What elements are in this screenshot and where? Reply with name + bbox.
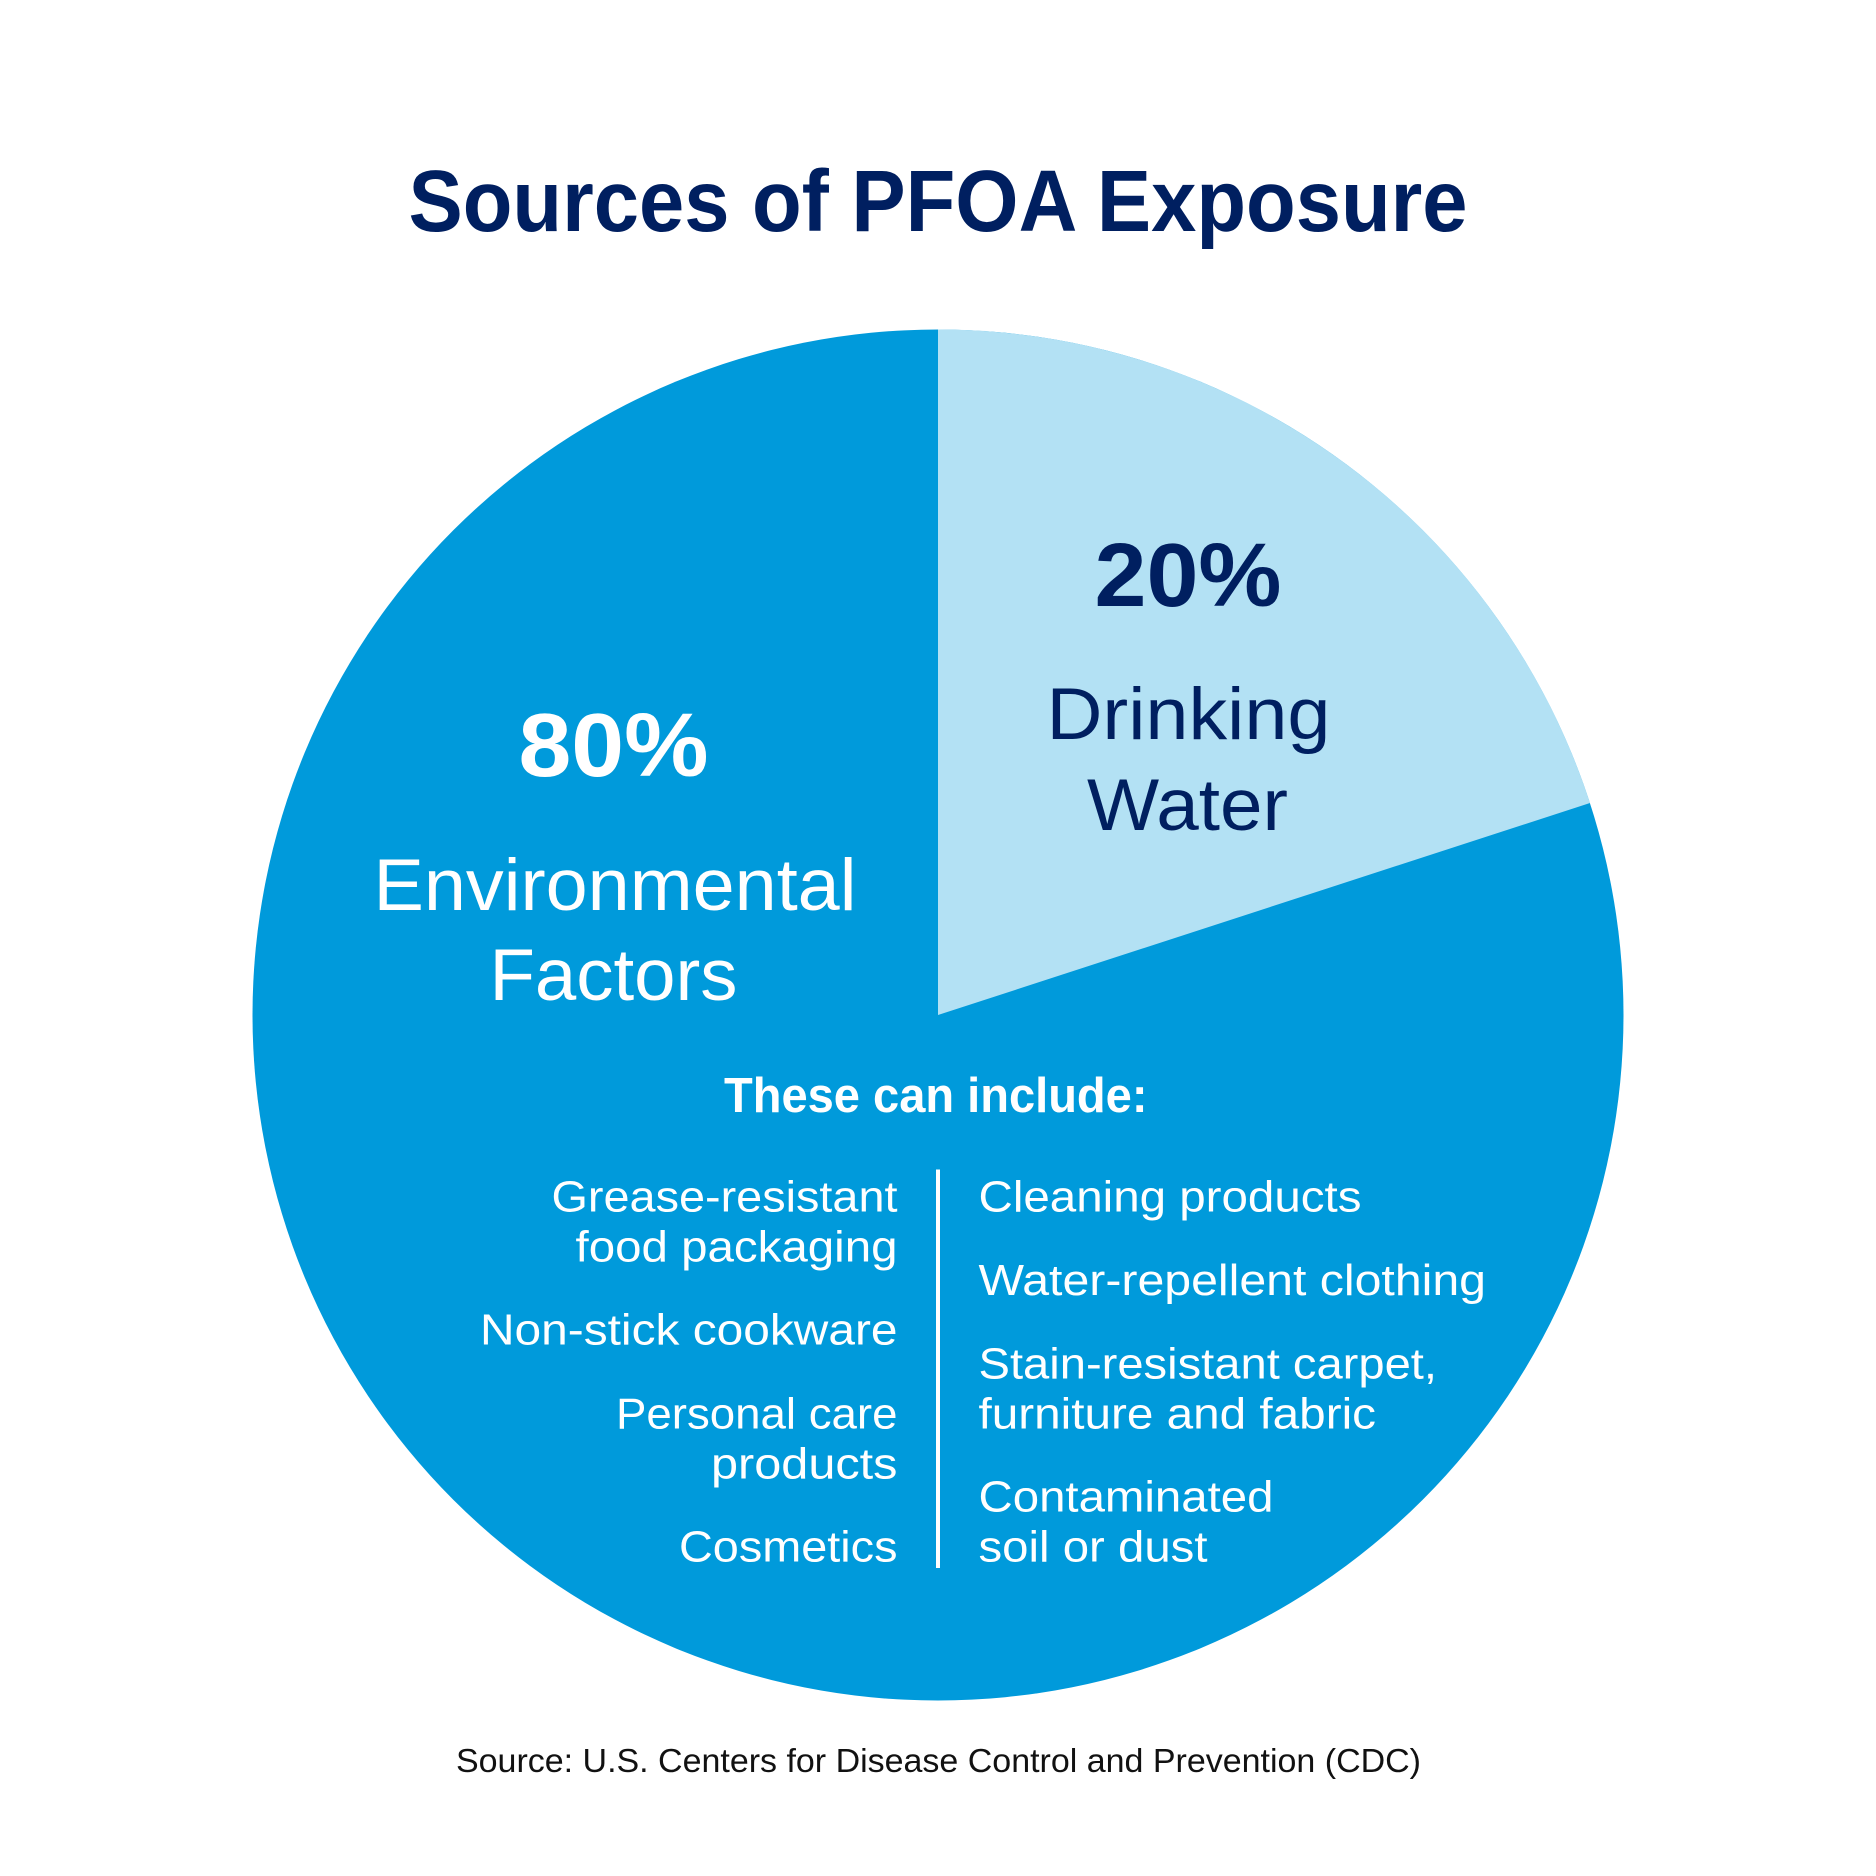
list: left column: Personal care	[616, 1390, 898, 1438]
pie chart	[252, 330, 1624, 1700]
title: Sources of PFOA Exposure	[408, 153, 1468, 250]
slice: 80% environmental factors	[252, 330, 1624, 1700]
label: 80% environmental factors: Environmental	[374, 845, 856, 926]
subheading: these can include: These can include:	[724, 1069, 1148, 1123]
label: 20% drinking water: Water	[1087, 765, 1288, 846]
label: 80% environmental factors: Factors	[490, 935, 738, 1016]
list: right column: soil or dust	[978, 1522, 1208, 1572]
list: right column: Water-repellent clothing	[978, 1256, 1486, 1305]
list: left column: Non-stick cookware	[480, 1306, 898, 1354]
label: 80% environmental factors: 80%	[518, 696, 708, 796]
list: left column: Cosmetics	[679, 1522, 898, 1572]
list: left column	[480, 1172, 898, 1572]
list: left column: Grease-resistant	[552, 1172, 898, 1222]
list: right column: Contaminated	[978, 1472, 1274, 1522]
list: right column: Cleaning products	[978, 1172, 1362, 1222]
column divider	[936, 1170, 940, 1568]
list: right column	[978, 1172, 1486, 1572]
label: 20% drinking water: Drinking	[1046, 674, 1330, 755]
slice: 20% drinking water	[938, 330, 1590, 1015]
list: left column: products	[711, 1440, 898, 1488]
list: left column: food packaging	[576, 1222, 898, 1272]
source note: Source: U.S. Centers for Disease Control and Prevention (CDC)	[456, 1742, 1421, 1779]
list: right column: furniture and fabric	[978, 1390, 1376, 1438]
label: 20% drinking water: 20%	[1094, 526, 1282, 626]
list: right column: Stain-resistant carpet,	[978, 1340, 1437, 1388]
label: 20% drinking water	[1046, 526, 1330, 846]
label: 80% environmental factors	[374, 696, 856, 1016]
